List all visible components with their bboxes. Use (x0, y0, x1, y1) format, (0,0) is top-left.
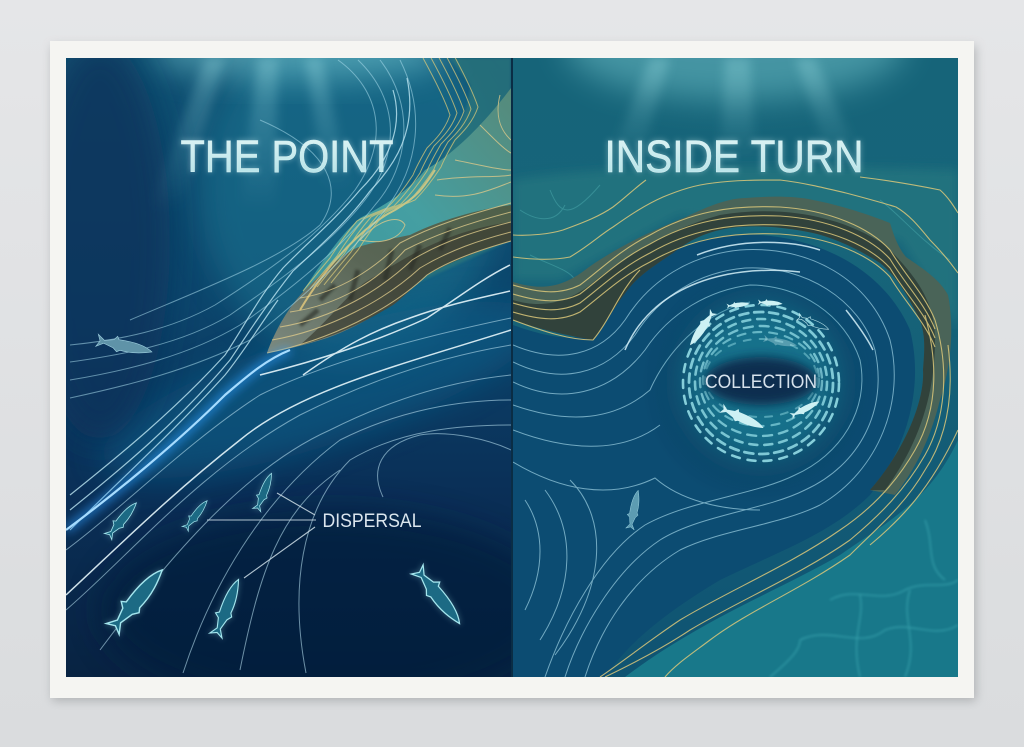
shallow shelf (421, 58, 511, 282)
glowing main current (66, 350, 290, 530)
paper sheet (50, 41, 976, 701)
current lines around the pool (513, 250, 894, 677)
bright flow arrows (625, 242, 873, 350)
current lines below the point (66, 318, 511, 673)
callout lines: dispersal (207, 493, 316, 578)
rock depth contours (267, 95, 511, 353)
label: collection: COLLECTION (705, 372, 817, 393)
shelf cracks (520, 185, 950, 280)
light rays (624, 58, 844, 140)
fish school: collection ring (683, 305, 839, 461)
converging stream lines (70, 78, 410, 530)
label: dispersal: DISPERSAL (322, 511, 422, 532)
icon: lone fish left (95, 333, 152, 354)
deep pool basin (513, 234, 915, 677)
shallow bank lower right (625, 440, 958, 677)
rocky ledge (513, 197, 951, 495)
caustics (770, 520, 958, 677)
pool centre (664, 290, 856, 482)
light rays (166, 58, 340, 184)
panel: inside turn (513, 0, 958, 677)
yellow depth contours (513, 177, 958, 677)
title: inside turn: INSIDE TURN (604, 131, 864, 182)
school glow (681, 302, 841, 462)
title: the point: THE POINT (180, 131, 394, 182)
centre divider (508, 58, 516, 677)
icon: lone fish lower left (625, 490, 640, 530)
rocky point (267, 205, 511, 353)
panel: the point (66, 58, 511, 677)
icons: larger schooling fish (686, 299, 830, 433)
upper shelf (513, 167, 958, 330)
current lines above the point (70, 60, 416, 398)
yellow shelf contours (300, 50, 478, 310)
dispersal fish group (103, 471, 467, 638)
dark centre of school (705, 357, 817, 405)
